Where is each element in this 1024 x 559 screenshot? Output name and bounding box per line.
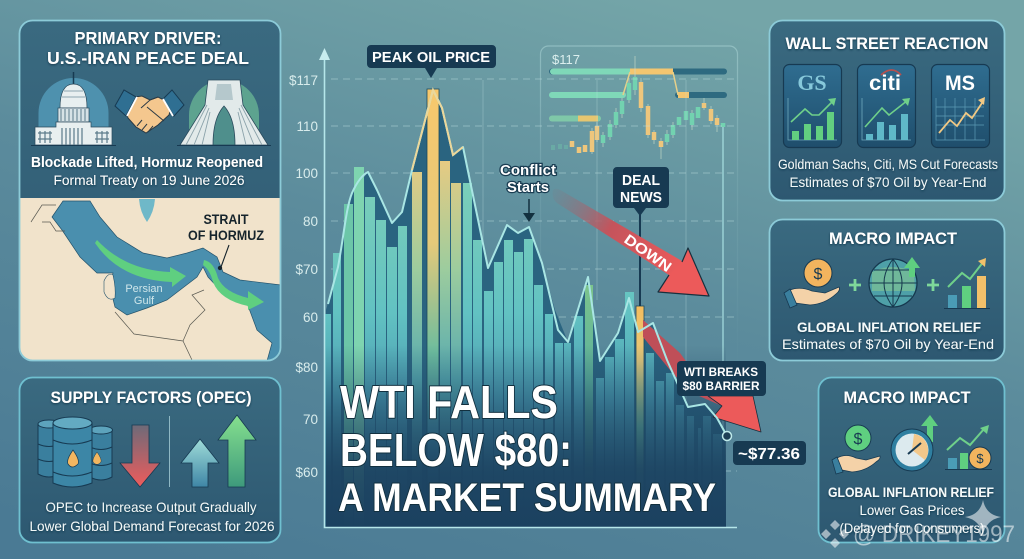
heading: supply factors: SUPPLY FACTORS (OPEC): [50, 388, 252, 407]
icon: coin over hand: [784, 259, 840, 308]
panel text: gas prices: (Delayed for Consumers): [840, 520, 984, 536]
icon: coin over hand: $: [814, 266, 823, 283]
card: morgan stanley: MS: [945, 72, 975, 95]
callout: WTI breaks $80 barrier: WTI BREAKS: [684, 365, 758, 379]
panel: macro impact bottom: [818, 378, 1004, 542]
panel: macro impact top: [770, 220, 1004, 360]
deal news leader line: [639, 208, 641, 306]
y axis labels: $117: [289, 73, 318, 88]
label: strait of hormuz: [188, 214, 264, 240]
panel text: gas prices: [828, 485, 994, 536]
plus: [849, 279, 861, 291]
y axis labels: 60: [303, 310, 318, 325]
panel text: blockade lifted: [31, 154, 263, 188]
callout: WTI breaks $80 barrier: $80 BARRIER: [682, 379, 760, 393]
panel text: inflation relief: [782, 319, 994, 352]
card: morgan stanley: [932, 64, 990, 148]
panel text: forecasts: [778, 156, 998, 190]
y axis labels: [289, 73, 318, 480]
big red arrow: down: [552, 189, 709, 296]
heading: wall street reaction: WALL STREET REACTION: [786, 34, 988, 53]
callout: end price: [733, 441, 806, 465]
callout: end price: ~$77.36: [738, 446, 800, 463]
title backdrop: [326, 345, 726, 527]
heading: macro impact: MACRO IMPACT: [844, 388, 971, 407]
panel text: gas prices: Lower Gas Prices: [860, 502, 964, 518]
flow arrow west: [95, 240, 186, 287]
area under price line: [326, 90, 725, 527]
heading: primary driver: [47, 28, 249, 68]
y axis labels: 110: [296, 119, 318, 134]
panel: wall street reaction: [770, 20, 1004, 200]
callout: deal news: [613, 167, 669, 216]
callout: conflict starts: Starts: [507, 180, 549, 196]
label: persian gulf: [126, 284, 162, 304]
drop: [139, 199, 155, 222]
y axis labels: 80: [303, 214, 318, 229]
watermark: @ DRIKEY1997: [853, 521, 1015, 548]
icon: azadi tower: [177, 80, 271, 146]
flow arrow east: [203, 260, 264, 310]
main title: A MARKET SUMMARY: [338, 476, 716, 520]
icon: gauge with up arrow: [891, 415, 938, 471]
label: persian gulf: Gulf: [134, 295, 155, 307]
heading: primary driver: PRIMARY DRIVER:: [74, 28, 222, 48]
callout: conflict starts: Conflict: [500, 163, 556, 179]
icon: green coin over hand: $: [854, 431, 863, 448]
panel text: gas prices: GLOBAL INFLATION RELIEF: [828, 485, 994, 500]
callout: conflict starts: [500, 163, 556, 222]
card: citi: [858, 64, 916, 148]
lower red arrow head: [708, 396, 761, 432]
heading: macro impact: MACRO IMPACT: [829, 229, 958, 248]
label: persian gulf: Persian: [125, 283, 163, 295]
price line: [328, 90, 727, 436]
panel text: forecasts: Estimates of $70 Oil by Year-End: [790, 174, 986, 190]
icon: handshake: [115, 90, 184, 133]
lower red arrow shaft: [643, 320, 722, 406]
icon: capitol: [31, 72, 116, 146]
icon: globe: [869, 257, 920, 307]
panel text: opec: [30, 499, 275, 534]
y axis labels: $60: [295, 465, 318, 480]
icon: blue up arrow: [181, 439, 219, 487]
main title: BELOW $80:: [340, 424, 572, 476]
icon: red down arrow: [120, 425, 160, 487]
panel: supply factors: [20, 378, 280, 542]
callout: peak oil price: PEAK OIL PRICE: [372, 50, 490, 66]
y axis labels: $70: [295, 262, 318, 277]
icon: green up arrow: [218, 415, 256, 487]
map: strait of hormuz: [20, 198, 281, 361]
callout: deal news: DEAL: [622, 173, 660, 189]
icon: chart with coin: [945, 425, 992, 470]
icon: green coin over hand: [832, 425, 880, 474]
icon: chart with coin: $: [976, 451, 984, 466]
label: strait of hormuz: STRAIT: [204, 212, 249, 227]
axis arrow: [319, 48, 330, 60]
panel text: opec: OPEC to Increase Output Gradually: [46, 499, 256, 515]
panel text: inflation relief: GLOBAL INFLATION RELIEF: [797, 319, 981, 335]
red arrow head outline: [658, 248, 709, 296]
price line peak highlight: [412, 90, 463, 170]
watermark: [821, 500, 1015, 548]
end point marker: [722, 432, 732, 440]
y axis and x axis: [324, 60, 737, 528]
label: strait of hormuz: OF HORMUZ: [188, 228, 264, 243]
panel text: opec: Lower Global Demand Forecast for 2026: [30, 518, 275, 534]
card: goldman sachs: [784, 64, 842, 148]
card: goldman sachs: GS: [797, 70, 827, 95]
callout: deal news: NEWS: [620, 190, 662, 206]
gridlines: [331, 79, 737, 471]
inset candlestick chart: $117: [552, 52, 580, 67]
heading: primary driver: U.S.-IRAN PEACE DEAL: [47, 48, 249, 68]
main title: [338, 376, 716, 520]
bars: [325, 89, 722, 527]
y axis labels: 100: [295, 166, 318, 181]
icon: growth chart: [944, 258, 990, 308]
callout: WTI breaks $80 barrier: [677, 361, 766, 396]
price chart: [289, 45, 806, 528]
y axis labels: 70: [303, 412, 318, 427]
plus: [927, 279, 939, 291]
card: citi: citi: [869, 72, 901, 95]
icon: oil barrels: [38, 417, 112, 487]
panel text: inflation relief: Estimates of $70 Oil by Year-End: [782, 336, 994, 352]
callout: peak oil price: [367, 45, 496, 78]
inset candlestick chart: [540, 46, 738, 376]
y axis labels: $80: [295, 360, 318, 375]
panel text: blockade lifted: Blockade Lifted, Hormuz Reopened: [31, 154, 263, 171]
panel text: forecasts: Goldman Sachs, Citi, MS Cut Forecasts: [778, 156, 998, 172]
panel: primary driver: [20, 20, 281, 361]
water: persian gulf and gulf of oman: [52, 201, 281, 361]
panel text: blockade lifted: Formal Treaty on 19 June 2026: [54, 172, 245, 188]
borders: [31, 205, 205, 360]
arrow label: down: DOWN: [621, 232, 674, 276]
qatar peninsula: [104, 274, 115, 299]
main title: WTI FALLS: [340, 376, 558, 428]
